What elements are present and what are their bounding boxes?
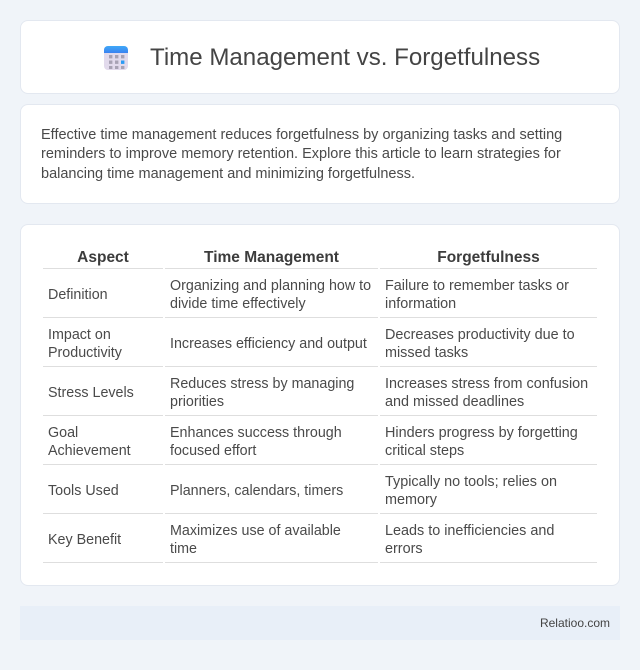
heading: Time Management column: Time Management xyxy=(204,249,339,266)
table row: Tools Used xyxy=(48,474,557,508)
table row: Impact on Productivity xyxy=(48,327,575,361)
table row: Definition: information xyxy=(385,296,456,312)
table row: Definition xyxy=(48,278,569,312)
table row: Impact on Productivity: missed tasks xyxy=(385,345,468,361)
table row: Goal Achievement: Enhances success through xyxy=(170,425,342,441)
table row: Goal Achievement: Goal xyxy=(48,425,78,441)
table row: Goal Achievement: critical steps xyxy=(385,443,464,459)
table row: Stress Levels: Reduces stress by managing xyxy=(170,376,354,392)
text block: introduction: reminders to improve memory retention. Explore this article to learn strategies for xyxy=(41,146,561,162)
table row: Goal Achievement: focused effort xyxy=(170,443,256,459)
table row: Stress Levels: priorities xyxy=(170,394,224,410)
table row: Key Benefit: errors xyxy=(385,541,423,557)
table row: Key Benefit: Key Benefit xyxy=(48,532,121,548)
table row: Stress Levels: and missed deadlines xyxy=(385,394,524,410)
text block: introduction: balancing time management and minimizing forgetfulness. xyxy=(41,166,415,182)
table row: Impact on Productivity: Decreases productivity due to xyxy=(385,327,575,343)
footer bar xyxy=(20,606,620,640)
heading: Forgetfulness column: Forgetfulness xyxy=(437,249,540,266)
title: Time Management vs. Forgetfulness xyxy=(150,44,540,71)
icon: calendar xyxy=(104,46,128,70)
table row: Key Benefit: Maximizes use of available xyxy=(170,523,341,539)
table row: Tools Used: memory xyxy=(385,492,437,508)
table row: Key Benefit: Leads to inefficiencies and xyxy=(385,523,554,539)
table row: Key Benefit: time xyxy=(170,541,197,557)
text block: introduction xyxy=(41,126,562,182)
table row: Stress Levels xyxy=(48,376,588,410)
table row: Stress Levels: Stress Levels xyxy=(48,385,134,401)
table row: Impact on Productivity: Productivity xyxy=(48,345,122,361)
panel: title card xyxy=(20,20,620,94)
heading: Aspect column: Aspect xyxy=(77,249,129,266)
table row: Key Benefit xyxy=(48,523,554,557)
table row: Tools Used: Typically no tools; relies on xyxy=(385,474,557,490)
table row: Definition: Failure to remember tasks or xyxy=(385,278,569,294)
table row: Stress Levels: Increases stress from confusion xyxy=(385,376,588,392)
table row: Definition: divide time effectively xyxy=(170,296,306,312)
table row: Goal Achievement xyxy=(48,425,578,459)
panel: introduction card xyxy=(20,104,620,204)
table row: Goal Achievement: Achievement xyxy=(48,443,131,459)
text block: introduction: Effective time management reduces forgetfulness by organizing tasks and setting xyxy=(41,126,562,142)
table row: Definition: Definition xyxy=(48,287,108,303)
panel: comparison table card xyxy=(20,224,620,586)
table row: Impact on Productivity: Increases efficiency and output xyxy=(170,336,367,352)
table row: Goal Achievement: Hinders progress by forgetting xyxy=(385,425,578,441)
table row: Impact on Productivity: Impact on xyxy=(48,327,111,343)
table row: Definition: Organizing and planning how to xyxy=(170,278,371,294)
footer text: Relatioo.com: Relatioo.com xyxy=(540,616,610,630)
table row: Tools Used: Tools Used xyxy=(48,483,119,499)
table row: Tools Used: Planners, calendars, timers xyxy=(170,483,343,499)
